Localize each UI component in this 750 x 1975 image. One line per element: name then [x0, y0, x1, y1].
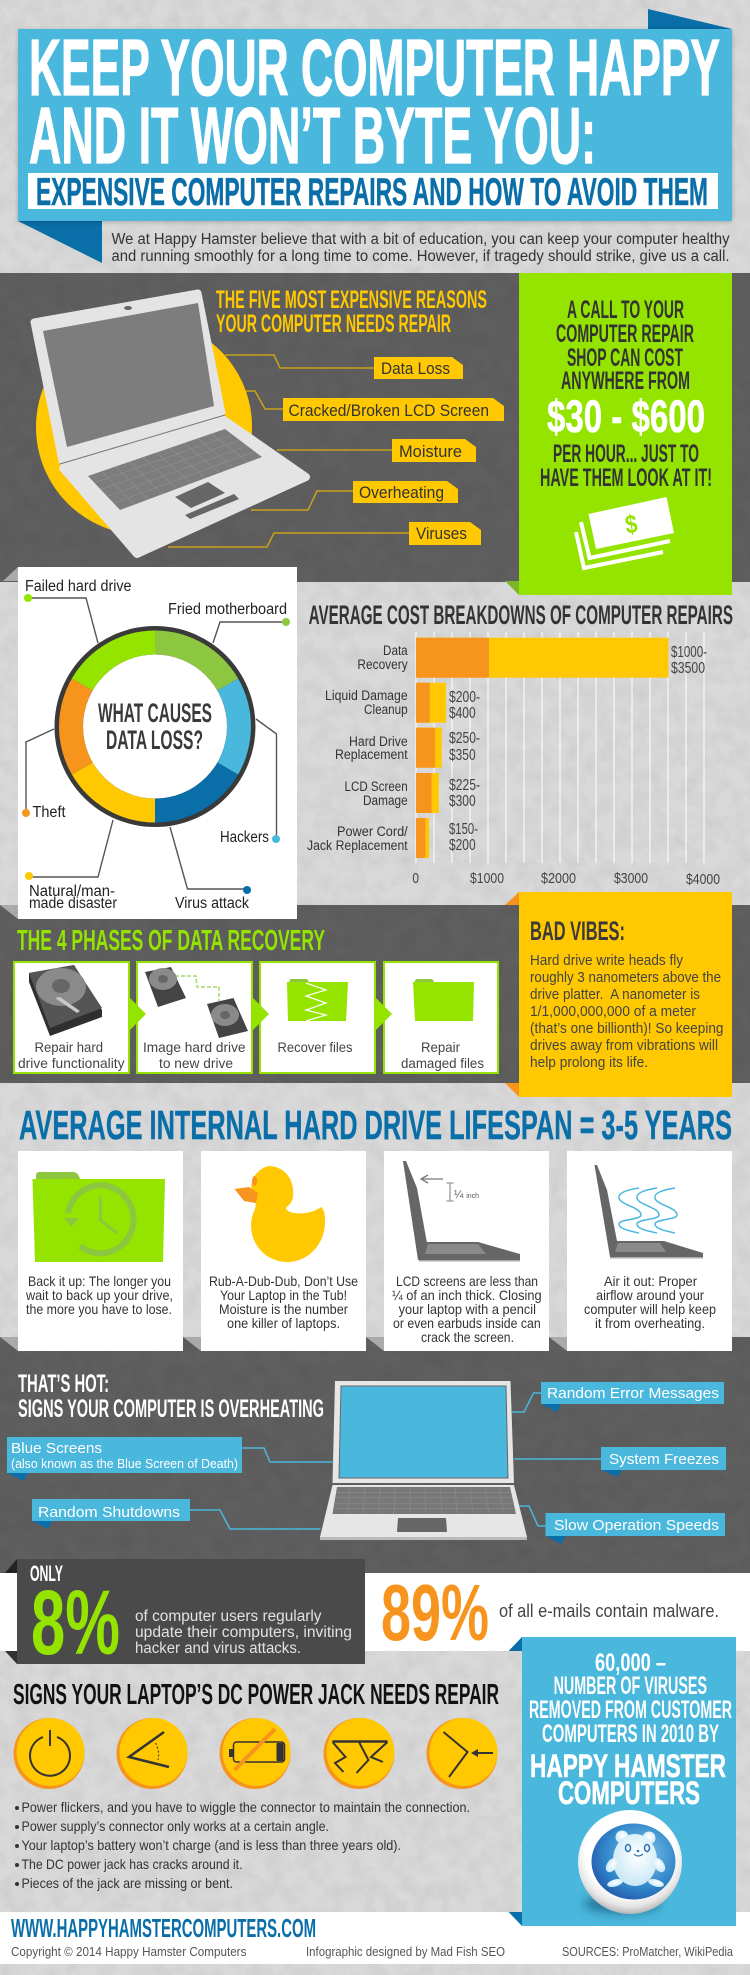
- icon: laptop: [34, 293, 306, 554]
- phase 4 text: Repair: [421, 1039, 460, 1055]
- tag: slow operation speeds: Slow Operation Speeds: [554, 1517, 719, 1534]
- card: air it out: [567, 1151, 732, 1351]
- phase 4 text: damaged files: [401, 1055, 484, 1071]
- bar: lcd screen: $225-: [449, 777, 480, 794]
- icon: power flicker: [14, 1718, 84, 1789]
- intro text: We at Happy Hamster believe that with a bit of education, you can keep your computer healthy: [112, 231, 730, 248]
- heading: five reasons: THE FIVE MOST EXPENSIVE REASONS: [216, 286, 487, 314]
- label: fried motherboard: Fried motherboard: [168, 601, 287, 618]
- label: theft: Theft: [32, 804, 66, 821]
- text: lcd thickness: crack the screen.: [421, 1329, 514, 1345]
- icon: hamster logo: [578, 1810, 682, 1914]
- tag: moisture: [277, 439, 476, 462]
- icon: connector angle: [116, 1718, 188, 1789]
- tag: blue screens: Blue Screens: [11, 1440, 102, 1457]
- label: fried motherboard: [168, 601, 290, 626]
- heading: five reasons: YOUR COMPUTER NEEDS REPAIR: [216, 310, 451, 338]
- bar: lcd screen: Damage: [363, 793, 408, 808]
- icon: side-view laptop with measure: ¼ inch: [454, 1189, 479, 1201]
- text: viruses removed: 60,000 –: [595, 1649, 666, 1677]
- callout: 8 percent: [5, 1559, 365, 1674]
- text: lcd thickness: your laptop with a pencil: [399, 1301, 536, 1317]
- heading: five reasons: [216, 286, 487, 338]
- card: lcd thickness: [384, 1151, 549, 1351]
- heading: phases: THE 4 PHASES OF DATA RECOVERY: [17, 925, 325, 957]
- panel: overheating signs: [7, 1370, 726, 1544]
- bar: power cord: Power Cord/: [337, 824, 408, 839]
- tag: system freezes: [514, 1447, 726, 1477]
- stat: 89%: 89%: [381, 1568, 489, 1657]
- tag: blue screens: [7, 1437, 334, 1481]
- text: bad vibes body: [530, 953, 724, 1071]
- panel: data recovery phases: [14, 925, 498, 1073]
- icon: folder: [413, 979, 474, 1021]
- bar: data recovery: $1000-: [671, 644, 707, 661]
- tag: data loss: [225, 355, 463, 379]
- card: rubber duck: [201, 1151, 366, 1351]
- phase 3 text: Recover files: [278, 1039, 352, 1055]
- phase 4 text: [401, 1039, 484, 1071]
- bar: data recovery: Recovery: [357, 657, 408, 672]
- text: duck: one killer of laptops.: [227, 1315, 340, 1331]
- text: air it out: computer will help keep: [584, 1301, 716, 1317]
- bar: liquid damage: [325, 683, 480, 723]
- copyright: Copyright © 2014 Happy Hamster Computers: [11, 1945, 246, 1959]
- chart axis: $1000: [470, 870, 504, 887]
- bar: hard drive: Hard Drive: [349, 734, 408, 749]
- text: duck: Your Laptop in the Tub!: [220, 1287, 347, 1303]
- panel: what causes data loss: [0, 567, 297, 919]
- text: bad vibes body: drive platter. A nanometer is: [530, 987, 700, 1003]
- text: 8 percent description: update their computers, inviting: [135, 1624, 352, 1641]
- text: bad vibes body: Hard drive write heads fly: [530, 953, 684, 969]
- icon: zipped folder: [287, 979, 348, 1021]
- tag: random error messages: Random Error Messages: [547, 1385, 719, 1402]
- bar: power cord: $200: [449, 837, 476, 854]
- label: failed hard drive: Failed hard drive: [25, 578, 132, 595]
- tag: blue screens: (also known as the Blue Screen of Death): [11, 1457, 238, 1471]
- text: back it up: Back it up: The longer you: [28, 1273, 171, 1289]
- text: bad vibes body: roughly 3 nanometers above the: [530, 970, 721, 986]
- label: natural disaster: [25, 872, 117, 912]
- designer credit: Infographic designed by Mad Fish SEO: [306, 1945, 505, 1959]
- label: virus attack: Virus attack: [175, 895, 249, 912]
- footer: [11, 1913, 733, 1959]
- donut title: WHAT CAUSES: [98, 698, 212, 728]
- phase 3: [260, 962, 375, 1073]
- bar: lcd screen: LCD Screen: [344, 779, 408, 794]
- label: hackers: Hackers: [220, 829, 269, 846]
- phase 1 text: drive functionality: [18, 1055, 124, 1071]
- heading: that's hot: THAT’S HOT:: [18, 1370, 109, 1398]
- bar: hard drive: Replacement: [335, 747, 408, 762]
- list: power jack signs: Power flickers, and you have to wiggle the connector to maintain the connection.: [22, 1799, 470, 1815]
- text: cost outro: [540, 440, 712, 492]
- list: power jack signs: Your laptop’s battery won’t charge (and is less than three years old).: [22, 1837, 401, 1853]
- icon: side-view laptop with measure: [403, 1161, 520, 1262]
- leader lines: [26, 598, 282, 889]
- chart axis: $3000: [614, 870, 648, 887]
- donut chart: [54, 626, 256, 827]
- header banner: [18, 9, 732, 263]
- panel: lifespan tips: [0, 1151, 732, 1351]
- icon: hard drive: [29, 965, 102, 1036]
- tag: cracked screen: [246, 391, 504, 421]
- bar: data recovery: $3500: [671, 660, 705, 677]
- icon: money: [576, 497, 674, 568]
- text: lcd thickness: LCD screens are less than: [396, 1273, 538, 1289]
- bar: lcd screen: [344, 773, 480, 813]
- icon: money: $: [623, 508, 640, 540]
- bar: hard drive: $350: [449, 747, 476, 764]
- bar: liquid damage: $400: [449, 705, 476, 722]
- icon: bent jack: [426, 1718, 498, 1789]
- text: air it out: [584, 1273, 716, 1331]
- tag: overheating: [251, 481, 458, 510]
- tag: overheating: Overheating: [359, 484, 444, 502]
- donut title: DATA LOSS?: [106, 725, 203, 755]
- list: power jack signs: The DC power jack has cracks around it.: [22, 1856, 242, 1872]
- intro text: [112, 231, 730, 265]
- heading: that's hot: [18, 1370, 324, 1423]
- icon: battery: [220, 1718, 290, 1789]
- text: duck: Rub-A-Dub-Dub, Don’t Use: [209, 1273, 358, 1289]
- panel: power jack icons: [14, 1718, 498, 1789]
- icon: backup folder: [32, 1172, 165, 1262]
- text: bad vibes body: 1/1,000,000,000 of a meter: [530, 1004, 696, 1020]
- phase 1 text: [18, 1039, 124, 1071]
- bar: liquid damage: Cleanup: [364, 702, 408, 717]
- panel: viruses removed: [509, 1637, 736, 1926]
- tag: random error messages: [512, 1382, 724, 1412]
- text: 89 percent description: of all e-mails contain malware.: [499, 1601, 719, 1621]
- text: cost intro: [556, 296, 694, 395]
- bar: data recovery: [357, 638, 707, 678]
- text: lcd thickness: or even earbuds inside can: [393, 1315, 541, 1331]
- bar chart: repair costs: [307, 632, 720, 888]
- arrow: phase 2 to 3: [253, 998, 269, 1030]
- text: back it up: [25, 1273, 173, 1317]
- bar: liquid damage: Liquid Damage: [325, 688, 408, 703]
- title: [29, 23, 720, 180]
- bar: power cord: [307, 818, 478, 858]
- icon: front laptop: [320, 1381, 527, 1540]
- icon: duck: [234, 1166, 325, 1262]
- text: duck: [209, 1273, 358, 1331]
- heading: bad vibes: BAD VIBES:: [530, 916, 625, 946]
- tag: random shutdowns: Random Shutdowns: [38, 1504, 180, 1521]
- label: failed hard drive: [24, 578, 132, 602]
- text: air it out: airflow around your: [596, 1287, 704, 1303]
- text: back it up: wait to back up your drive,: [25, 1287, 173, 1303]
- text: air it out: it from overheating.: [595, 1315, 705, 1331]
- text: 8 percent description: [135, 1608, 352, 1657]
- phase 2 text: [143, 1039, 246, 1071]
- text: only: ONLY: [30, 1561, 63, 1586]
- phase 2 text: Image hard drive: [143, 1039, 246, 1055]
- bar: power cord: $150-: [449, 821, 478, 838]
- tag: cracked screen: Cracked/Broken LCD Screen: [288, 402, 489, 420]
- donut title: [98, 698, 212, 755]
- bar: lcd screen: $300: [449, 793, 476, 810]
- callout: 89 percent: [381, 1568, 719, 1657]
- text: lcd thickness: [392, 1273, 542, 1345]
- tag: moisture: Moisture: [399, 443, 462, 461]
- chart axis: $2000: [541, 870, 576, 887]
- panel: bad vibes: [505, 892, 732, 1097]
- label: natural disaster: made disaster: [29, 895, 117, 912]
- card: back it up: [18, 1151, 183, 1351]
- brand name: [530, 1748, 726, 1811]
- icon: laptop with airflow: [594, 1165, 703, 1258]
- phase 4: [384, 962, 498, 1073]
- icon: cracks: [324, 1718, 394, 1789]
- stat: 8%: 8%: [31, 1572, 120, 1674]
- tag: viruses: Viruses: [416, 525, 467, 543]
- phase 2 text: to new drive: [159, 1055, 233, 1071]
- chart axis: $4000: [686, 871, 720, 888]
- bar: hard drive: $250-: [449, 730, 480, 747]
- tag: random shutdowns: [32, 1499, 320, 1529]
- website url: WWW.HAPPYHAMSTERCOMPUTERS.COM: [11, 1913, 316, 1943]
- icon: image transfer: [145, 967, 248, 1038]
- bar: power cord: Jack Replacement: [307, 838, 408, 853]
- arrow: phase 3 to 4: [376, 998, 392, 1030]
- bar: hard drive: [335, 728, 480, 768]
- label: virus attack: [175, 886, 251, 912]
- label: natural disaster: Natural/man-: [29, 883, 115, 900]
- tag: viruses: [168, 522, 481, 547]
- text: bad vibes body: (that’s one billionth)! So keeping: [530, 1021, 724, 1037]
- text: 8 percent description: hacker and virus attacks.: [135, 1640, 301, 1657]
- text: back it up: the more you have to lose.: [26, 1301, 172, 1317]
- text: duck: Moisture is the number: [219, 1301, 348, 1317]
- arrow: phase 1 to 2: [130, 998, 146, 1030]
- text: air it out: Air it out: Proper: [604, 1273, 697, 1289]
- list: power jack signs: Pieces of the jack are missing or bent.: [22, 1875, 233, 1891]
- phase 2: [137, 962, 252, 1073]
- text: bad vibes body: drives away from vibrations will: [530, 1038, 718, 1054]
- bar: liquid damage: $200-: [449, 689, 480, 706]
- tag: data loss: Data Loss: [381, 360, 450, 378]
- panel: five reasons: [34, 286, 504, 554]
- tag: system freezes: System Freezes: [609, 1451, 719, 1468]
- bar: data recovery: Data: [383, 643, 408, 658]
- text: viruses removed: [529, 1649, 732, 1748]
- text: 8 percent description: of computer users regularly: [135, 1608, 322, 1625]
- text: bad vibes body: help prolong its life.: [530, 1055, 648, 1071]
- phase 1: [14, 962, 129, 1073]
- list: power jack signs: Power supply’s connector only works at a certain angle.: [22, 1818, 329, 1834]
- panel: repair shop cost: [505, 273, 732, 595]
- tag: slow operation speeds: [519, 1506, 725, 1544]
- chart axis: 0: [412, 870, 419, 887]
- phase 1 text: Repair hard: [34, 1039, 103, 1055]
- chart axis: [412, 870, 720, 888]
- intro text: and running smoothly for a long time to come. However, if tragedy should strike, give us a call.: [112, 248, 730, 265]
- text: lcd thickness: ¼ of an inch thick. Closing: [392, 1287, 542, 1303]
- heading: that's hot: SIGNS YOUR COMPUTER IS OVERHEATING: [18, 1395, 324, 1423]
- list: power jack signs: [15, 1799, 470, 1891]
